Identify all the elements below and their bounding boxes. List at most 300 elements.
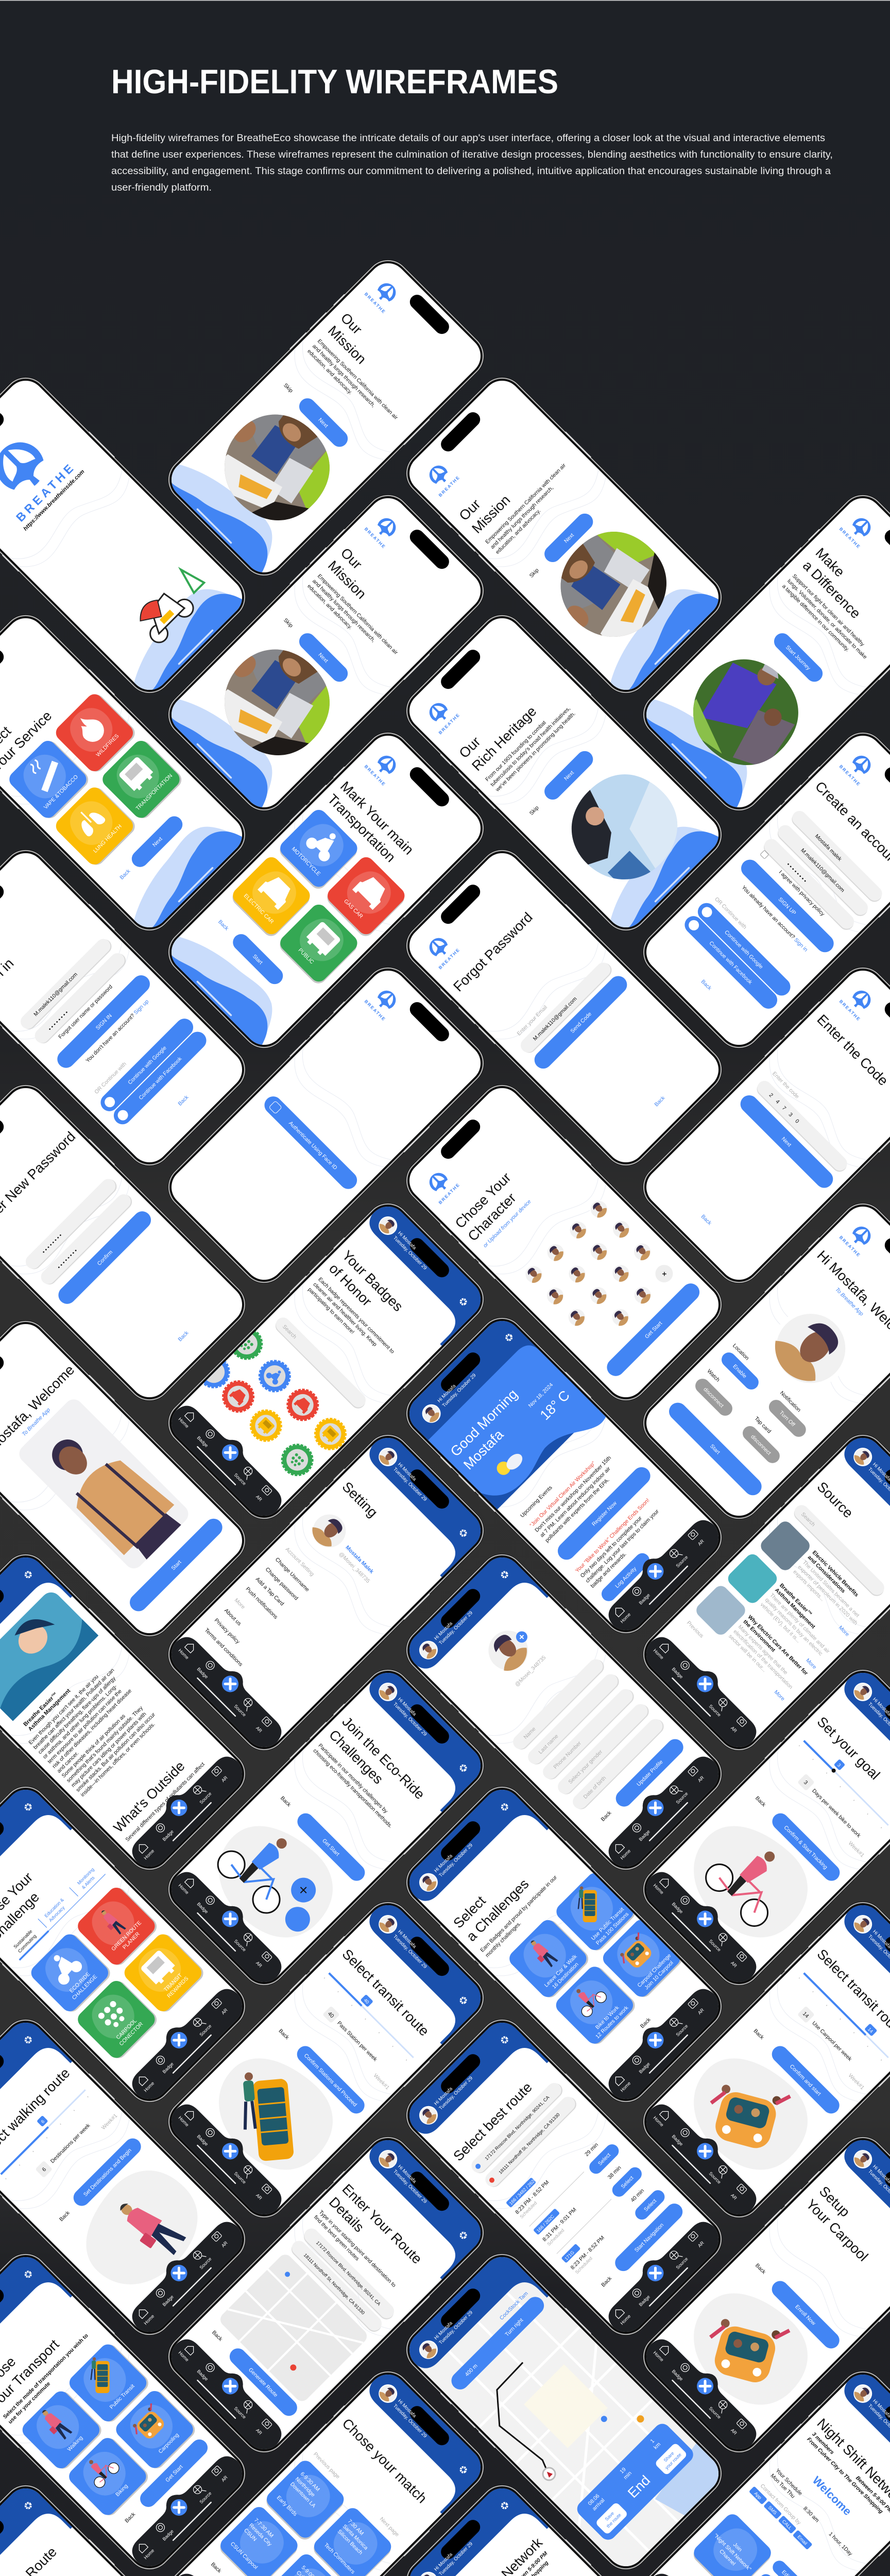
bottom navigation — [597, 2211, 732, 2346]
button: next — [541, 748, 596, 803]
tile: early birds: 6-9:30 AM — [299, 2471, 321, 2493]
phone: Select Your Service — [0, 605, 259, 944]
text block: From our 1903 founding to combat — [484, 720, 547, 783]
phone: Night Shift Network welcome — [630, 2362, 890, 2576]
route option one — [506, 2119, 622, 2235]
illustration: carpool car — [672, 2036, 826, 2190]
tabs: Commuting — [17, 1934, 37, 1954]
route option three: Scheduled — [574, 2256, 593, 2275]
profile greeting — [418, 1328, 517, 1427]
phone: Enter Your Route Details map — [155, 2127, 493, 2466]
button: get start: Get Start — [644, 1320, 663, 1340]
phone: Setup Your Carpool — [630, 2127, 890, 2466]
profile: @Mosei_348735 — [338, 1551, 371, 1584]
back link: Back — [600, 1809, 613, 1823]
heading: Select — [450, 1893, 489, 1931]
button: start: Start — [709, 1443, 721, 1455]
tile: eco-ride: CHALLENGE — [71, 1974, 98, 2001]
button: start — [230, 930, 286, 988]
back link: Back — [277, 2028, 290, 2041]
settings list: Add a Tap Card — [254, 1576, 285, 1607]
article: asthma management: Asthma Management — [774, 1587, 816, 1630]
avatar grid: × — [660, 1269, 669, 1278]
article heading: Breathe Easier™ — [22, 1691, 59, 1727]
back link: Back — [177, 1094, 190, 1107]
article: electric vehicle benefits: exporter of petroleum in 2020 with — [797, 1564, 859, 1626]
button: get start — [294, 1810, 368, 1884]
tile: vape and tobacco: VAPE &TOBACCO — [43, 774, 79, 810]
header band — [0, 2476, 75, 2576]
back link: Back — [124, 2511, 137, 2524]
tile: tech commuters: Silicon Beach — [336, 2529, 364, 2556]
phone: Select transit route forty — [155, 1892, 493, 2231]
route inputs: 18111 Nordhoff St, Northridge, CA 91330 — [303, 2252, 366, 2315]
trip summary panel: arrival — [591, 2497, 606, 2512]
input fields: M.malek110@gmail.com — [799, 848, 846, 893]
phone: Good Morning dashboard — [397, 1308, 735, 1647]
intro text block: accessibility, and engagement. This stage confirms our commitment to delivering a polished, intuitive application that encourages sustainable living through a — [111, 166, 831, 177]
intro text block: that define user experiences. These wireframes represent the culmination of iterative design processes, blending aesthetics with functionality to ensure clarity, — [111, 149, 833, 160]
search field — [791, 1502, 887, 1599]
article text: and cancer. — [56, 1750, 80, 1774]
button: generate route — [226, 2345, 301, 2419]
goal value: Use Carpool per week — [811, 2020, 853, 2062]
button: next: Next — [563, 770, 575, 782]
phone: Hi Mostafa welcome illustration — [0, 1311, 255, 1646]
tile: gas car — [323, 854, 409, 939]
heading: Mission — [325, 557, 369, 602]
photo blob — [198, 390, 351, 544]
form fields: Date of birth — [582, 1775, 607, 1800]
text block: Each badge represents your commitment to — [317, 1276, 396, 1355]
heading: Chose your match — [339, 2415, 430, 2506]
tile: motorcycle — [276, 806, 362, 892]
avatar — [756, 1293, 866, 1403]
phone: splash screen — [0, 377, 246, 693]
trip summary panel: your route — [664, 2452, 682, 2470]
tile: eco-ride — [28, 1930, 113, 2016]
phone: What's Outside — [0, 1545, 259, 1883]
slider — [799, 1732, 890, 1830]
heading: Our — [338, 545, 365, 572]
tile: walking: Walking — [66, 2435, 84, 2453]
button: google: Continue with Google — [723, 929, 764, 970]
event: challenge: badge and rewards. — [589, 1551, 628, 1589]
illustration: walker — [64, 2152, 218, 2306]
back link: Back — [653, 1095, 666, 1108]
upload link: or Upload from your device — [482, 1198, 533, 1249]
profile greeting: Tuesday, October 29 — [441, 1372, 477, 1409]
trip summary panel — [574, 2420, 696, 2543]
route option two: Scheduled — [546, 2228, 566, 2247]
greeting heading: Mostafa — [460, 1427, 507, 1472]
form fields: Last name — [537, 1733, 560, 1755]
header band — [339, 1194, 493, 1348]
schedule: Your Schedule — [774, 2467, 803, 2497]
bottom navigation — [121, 2211, 256, 2346]
handle: @Mosei_348735 — [514, 1654, 547, 1688]
button: confirm: Confirm — [96, 1249, 114, 1267]
button: facebook: Continue with Facebook — [138, 1056, 183, 1101]
article: asthma management: More — [805, 1657, 818, 1670]
photo blob — [198, 625, 351, 778]
header band: Hi Mostafa — [433, 2320, 454, 2341]
settings list: Change password — [264, 1566, 299, 1602]
bottom navigation — [597, 1978, 732, 2113]
goal value — [322, 2006, 381, 2064]
route inputs: 18111 Nordhoff St, Northridge, CA 91330 — [498, 2112, 561, 2175]
text block: participating to earn more! — [307, 1286, 355, 1335]
tile: tech commuters — [310, 2505, 395, 2576]
header band — [397, 2010, 551, 2164]
slider: 3 — [836, 1762, 842, 1768]
date: Nov 18, 2024 — [527, 1382, 554, 1409]
schedule: 1 hour, 1Day — [828, 2531, 854, 2557]
map — [217, 2252, 370, 2404]
button: send code — [531, 972, 630, 1072]
phone: Enter New Password — [0, 1075, 255, 1410]
heading: Set your goal — [814, 1714, 883, 1783]
button: enroll: Enroll Now — [794, 2303, 817, 2327]
tile: carpool: CONECTOR — [118, 2021, 145, 2047]
back link: Back — [279, 1795, 293, 1808]
tabs: & Alerts — [81, 1875, 96, 1890]
tile: green route: PLANER — [122, 1931, 141, 1951]
route inputs — [288, 2226, 398, 2335]
schedule: 8:30 am — [802, 2505, 820, 2524]
event: workshop: Don't miss our workshop on November 15th — [534, 1455, 612, 1533]
tile: vape and tobacco — [6, 737, 92, 822]
button: sign up: SIGN UP — [777, 896, 797, 917]
bottom navigation — [597, 1745, 732, 1880]
location shortcuts — [18, 2575, 92, 2576]
slider — [799, 1965, 890, 2062]
text block: education, and advocacy. — [306, 583, 353, 631]
tile: carpool: Carpool Challenge — [636, 1953, 672, 1989]
button: next — [299, 398, 348, 447]
tile: csun carpool — [216, 2504, 302, 2576]
article: electric vehicle benefits: exports imports... — [792, 1569, 826, 1602]
trip summary panel: km — [653, 2441, 662, 2451]
phone: Chose Your Challenge — [0, 1777, 259, 2115]
tile: transit rewards: REWARDS — [166, 1975, 190, 1999]
article text: risk of other diseases, including heart disease — [51, 1688, 133, 1770]
tile: transportation: TRANSPORTATION — [135, 773, 174, 811]
route option one: 166 / 3482 / 262C — [508, 2176, 538, 2206]
goal value — [797, 1773, 865, 1841]
text block: and healthy lungs through research, — [311, 343, 376, 409]
heading: Enter Your Route — [339, 2181, 425, 2267]
event: workshop: “Join Our Virtual Clean Air Workshop” — [528, 1460, 597, 1529]
code input: 24730 — [768, 1092, 805, 1129]
back link: Back — [754, 2262, 767, 2276]
heading: Forgot Password — [450, 909, 536, 995]
tabs: Monitoring — [76, 1867, 95, 1886]
route inputs: 17172 Roscoe Blvd, Northridge, 90241, CA — [315, 2240, 382, 2307]
agreement checkbox — [759, 850, 827, 918]
subheading: To Breathe App — [21, 1407, 52, 1437]
event: challenge: challenge. Log your last trips to claim your — [585, 1508, 660, 1584]
tile: motorcycle: MOTORCYCLE — [290, 846, 321, 877]
header band — [814, 2127, 890, 2282]
header band — [814, 1660, 890, 1815]
text block: Earn Badges and proud by participate in our — [479, 1874, 558, 1954]
heading: Your Carpool — [803, 2196, 871, 2264]
settings toggles: disconnect — [702, 1386, 725, 1409]
form fields — [510, 1656, 666, 1812]
article text: Even though you can't see it, the air you — [27, 1673, 100, 1746]
form fields: Phone Number — [552, 1740, 583, 1770]
header band — [0, 2010, 75, 2164]
goal value — [797, 2006, 856, 2064]
button: google: Continue with Google — [127, 1045, 168, 1086]
text block: we've been pioneers in promoting lung health. — [494, 710, 577, 793]
intro text block: High-fidelity wireframes for BreatheEco showcase the intricate details of our app's user interface, offering a closer look at the visual and interactive elements — [111, 133, 825, 144]
header band — [397, 2476, 551, 2576]
article illustration — [0, 1588, 98, 1721]
article text: inside—in homes, offices, or even schools. — [79, 1721, 157, 1798]
button: set destinations: Set Destinations and Begin — [82, 2147, 133, 2198]
bottom navigation — [632, 2093, 767, 2228]
button: confirm — [55, 1208, 155, 1308]
route option three: 40 min — [629, 2188, 645, 2204]
input fields: • • • • • • • • — [785, 861, 808, 884]
map — [397, 2244, 731, 2576]
button: enroll — [768, 2278, 843, 2352]
avatar grid — [521, 1195, 678, 1352]
heading: Mark Your main — [337, 778, 417, 858]
tile: wildfires — [53, 690, 138, 776]
heading: Enter the Code — [814, 1011, 890, 1089]
button: update profile — [612, 1736, 687, 1810]
forgot link: Forgot user name or password — [57, 984, 114, 1040]
tile: early birds — [262, 2458, 348, 2543]
button: google — [97, 1015, 197, 1115]
heading: Your Badges — [339, 1247, 406, 1314]
button: get start: Get Start — [164, 2464, 184, 2483]
route option two: 38 min — [607, 2164, 623, 2180]
heading: a Difference — [800, 557, 864, 621]
phone: Select best route — [397, 2010, 735, 2348]
skip link: Skip — [528, 805, 540, 817]
tile: csun carpool: Reseda City — [248, 2522, 273, 2548]
intro text block: user-friendly platform. — [111, 182, 212, 193]
heading: Details — [326, 2194, 367, 2235]
header and weather panel — [397, 1308, 609, 1521]
search field — [272, 1314, 369, 1412]
goal value: Days per week bike to work — [811, 1788, 862, 1839]
button: start: Start — [170, 1559, 183, 1571]
illustration card — [15, 1396, 192, 1572]
back link: Back — [58, 2210, 71, 2223]
tile: early birds: Downtown LA — [289, 2481, 317, 2509]
phone: Select walking route — [0, 2010, 259, 2348]
skip link: Skip — [282, 382, 294, 394]
back link: Back — [118, 868, 132, 881]
route inputs — [469, 2079, 579, 2190]
tile: night shift — [263, 2551, 349, 2576]
skip link: Skip — [282, 617, 294, 629]
goal value: Destinations per week — [49, 2122, 92, 2164]
tile: csun carpool: CSUN Carpool — [229, 2541, 259, 2570]
article: asthma management — [723, 1551, 843, 1670]
article text: may picture cars idling or power plants with — [70, 1711, 148, 1788]
text block: choosing eco-friendly transportation methods. — [312, 1748, 393, 1829]
route inputs: 17172 Roscoe Blvd, Northridge, 90241, CA — [484, 2095, 551, 2161]
trip summary panel: 08:06 — [587, 2493, 601, 2507]
tile: public transit — [66, 2340, 151, 2426]
tile: tech commuters: 7:30 AM — [347, 2518, 365, 2537]
or continue label: OR Continue with — [713, 896, 748, 930]
tile: green route — [75, 1884, 160, 1969]
settings list: Push notifications — [245, 1586, 279, 1620]
button: confirm — [294, 2043, 368, 2117]
illustration: cyclist — [672, 1804, 826, 1958]
article text: breathe can affect your health. Polluted air can — [32, 1667, 116, 1751]
tile: carpool: Join 10 Carpool — [643, 1960, 675, 1991]
tile: walking — [19, 2387, 105, 2473]
pagination: Next page — [379, 2516, 400, 2538]
tile: transit rewards — [121, 1930, 207, 2016]
button: generate route: Generate Route — [247, 2367, 279, 2398]
tile: lung health: LUNG HEALTH — [92, 823, 123, 854]
pagination — [312, 2450, 400, 2538]
illustration: cyclist — [197, 1804, 351, 1958]
bottom navigation — [121, 1745, 256, 1880]
slider: 14 — [867, 2027, 874, 2034]
schedule: Mon Tue Thu — [769, 2472, 796, 2500]
header band — [339, 1425, 493, 1580]
tile: biking: Biking — [114, 2483, 129, 2498]
phone: map navigation — [397, 2244, 731, 2576]
password inputs — [23, 1176, 135, 1288]
photo blob — [536, 510, 690, 663]
slider: 40 — [363, 1997, 370, 2005]
article: electric cars: More — [773, 1689, 786, 1702]
tile: carpool — [600, 1916, 685, 2001]
section heading: What's Outside — [111, 1758, 188, 1836]
phone: Join the Eco-Ride Challenges — [155, 1660, 493, 1998]
article: electric vehicle benefits — [756, 1518, 875, 1638]
settings list: Privacy policy — [213, 1617, 241, 1645]
password inputs: • • • • • • • • — [56, 1248, 79, 1270]
heading: Join the Eco-Ride — [339, 1714, 427, 1802]
tile: biking — [66, 2434, 151, 2519]
temperature: 18° C — [537, 1387, 573, 1423]
settings list: Change Username — [274, 1556, 311, 1593]
text block: Empowering Southern California with clean air — [316, 573, 399, 656]
event: workshop: at 7 PM. Learn about reducing indoor air — [539, 1466, 612, 1538]
article: electric vehicle benefits: Electric Vehicle Benefits — [811, 1550, 860, 1598]
join tile: Channel — [718, 2548, 737, 2567]
settings toggles: disconnect — [749, 1434, 772, 1456]
settings toggles: Enable — [731, 1363, 748, 1380]
tile: public transit: Use Public Transit — [590, 1906, 625, 1942]
route option three — [561, 2174, 668, 2281]
text block: Empowering Southern California with clean air — [484, 462, 567, 545]
goal value: 14 — [801, 2011, 810, 2020]
bottom navigation — [597, 1509, 732, 1644]
tile: electric car: ELECTRIC CAR — [243, 893, 275, 925]
icon: sun and cloud — [494, 1448, 525, 1480]
tile: csun carpool: CSUN — [243, 2527, 258, 2543]
phone: Forgot Password — [397, 840, 731, 1175]
header band — [397, 1545, 551, 1699]
input fields: • • • • • • • • — [47, 1009, 70, 1032]
tile: csun carpool: 7-7:30 AM — [253, 2517, 275, 2539]
header band — [814, 2362, 890, 2516]
phone: Your Badges of Honor — [146, 1185, 493, 1532]
back link: Back — [210, 2561, 222, 2574]
pagination: Previous — [686, 1620, 705, 1639]
back link: Back — [752, 2028, 765, 2041]
button: next — [128, 813, 186, 871]
button: next: Next — [317, 652, 329, 664]
back link: Back — [754, 1795, 767, 1808]
settings toggles: Turn Off — [778, 1410, 796, 1428]
turn instruction — [448, 2293, 547, 2393]
phone: Face ID — [159, 958, 493, 1293]
route option two: 8:31 PM - 9:01 PM — [541, 2207, 578, 2243]
back link: Back — [211, 2329, 224, 2343]
heading: Setting — [339, 1479, 381, 1520]
article continuation: Several different types of pollutants can affect — [124, 1761, 206, 1843]
route option one: 29 min — [584, 2142, 600, 2158]
trip summary panel: the route — [606, 2512, 622, 2529]
form fields: Name — [522, 1726, 537, 1740]
button: get start — [603, 1280, 703, 1380]
event: workshop: pollutants with experts from the EPA. — [544, 1477, 611, 1544]
phone: Our Mission top — [168, 260, 484, 576]
phone: Choose Your Transport — [0, 2244, 259, 2576]
tabs: Advocacy — [48, 1905, 66, 1923]
week label: Week#1 — [100, 2112, 118, 2131]
group details: 3 members — [811, 2431, 835, 2456]
tile: bike to work: 12 Routes to work — [594, 2005, 630, 2040]
button: next: Next — [151, 836, 164, 848]
button: next: Next — [317, 417, 329, 429]
password inputs: • • • • • • • • — [41, 1232, 63, 1255]
button: confirm — [769, 1810, 843, 1884]
tile: gas car: GAS CAR — [343, 898, 364, 920]
or continue label: OR Continue with — [93, 1061, 128, 1095]
phone: Sign in — [0, 840, 255, 1175]
settings toggles: Watch — [706, 1368, 721, 1383]
header band — [0, 1545, 75, 1699]
heading: Chose Your — [452, 1170, 514, 1231]
text block: Empowering Southern California with clean air — [316, 338, 399, 421]
illustration: carpool car — [672, 2271, 826, 2425]
map label: CockStock Tam — [499, 2291, 529, 2321]
icon: Breathe logo — [0, 442, 43, 490]
week label: Week#1 — [372, 2073, 391, 2091]
profile: Mostafa Malek — [344, 1545, 375, 1575]
event: challenge: Only two days left to complete your — [579, 1515, 643, 1579]
bottom navigation — [158, 1861, 293, 1996]
bottom navigation — [121, 1978, 256, 2113]
article: asthma management: vehicle (EV), but it is... — [759, 1602, 801, 1644]
article: asthma management: There are plenty of climate and air — [768, 1592, 831, 1655]
pagination: Previous page — [312, 2451, 341, 2480]
heading: Our — [338, 310, 365, 337]
button: sign up — [738, 856, 837, 956]
heading: a Challenges — [464, 1876, 532, 1944]
button: next — [296, 630, 351, 685]
text block: Participate in our monthly challenges by — [317, 1742, 389, 1815]
photo blob — [550, 752, 700, 904]
tabs — [8, 1863, 106, 1960]
bottom navigation — [632, 1626, 767, 1761]
